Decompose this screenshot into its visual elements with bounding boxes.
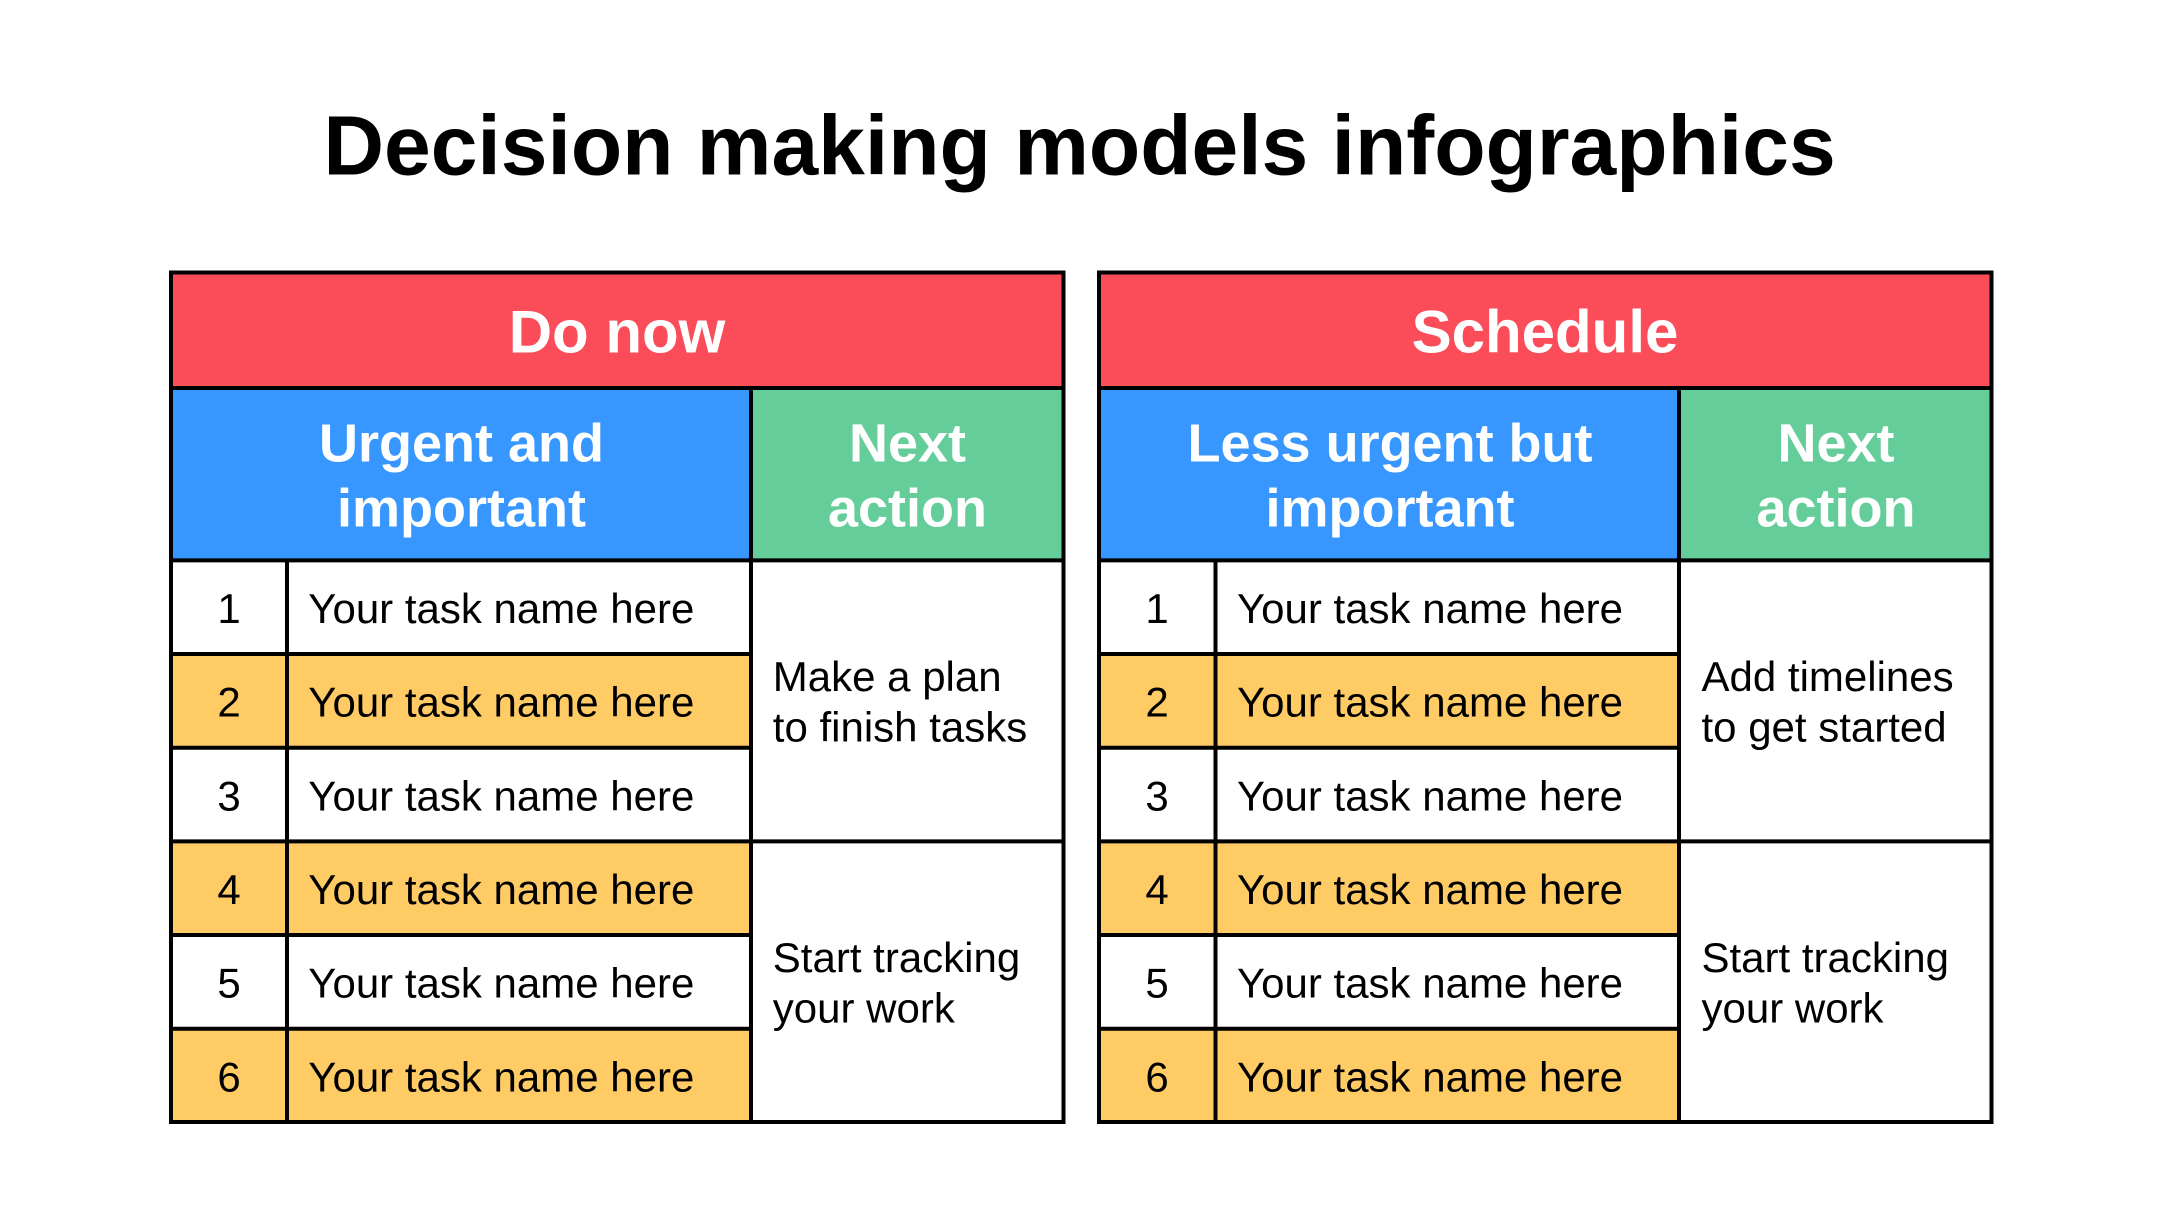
column header: Less urgent but important: Less urgent but <box>1187 414 1593 474</box>
task row 2: 2 <box>217 679 241 726</box>
task row 1: Your task name here <box>308 585 694 632</box>
task row 2 <box>1099 654 1679 748</box>
next action: Start tracking: your work <box>1702 984 1885 1031</box>
task row 6: Your task name here <box>308 1053 694 1100</box>
task row 5: 5 <box>217 960 241 1007</box>
task row 4: 4 <box>217 866 241 913</box>
task row 3: 3 <box>1145 772 1169 819</box>
task row 4 <box>171 841 751 935</box>
task row 5: Your task name here <box>308 960 694 1007</box>
next action: Make a plan <box>773 653 1027 750</box>
column header: Urgent and important <box>171 388 751 560</box>
column header: Less urgent but important <box>1099 388 1679 560</box>
column header: Next action <box>1679 388 1992 560</box>
column header: Next action: action <box>1756 478 1916 538</box>
task row 1: 1 <box>217 585 241 632</box>
task row 2: Your task name here <box>1237 679 1623 726</box>
next action: Start tracking: Start tracking <box>1702 934 1949 981</box>
next action: Make a plan: to finish tasks <box>773 703 1027 750</box>
column header: Next action: action <box>828 478 987 538</box>
heading: Do now: Do now <box>509 299 726 366</box>
panel: Schedule table <box>1099 272 1992 1122</box>
next action: Add timelines <box>1702 653 1954 750</box>
column header: Less urgent but important: important <box>1266 478 1515 538</box>
task row 2: 2 <box>1145 679 1169 726</box>
task row 4 <box>1099 841 1679 935</box>
task row 3: 3 <box>217 772 241 819</box>
heading: Schedule <box>1099 272 1992 388</box>
title: Decision making models infographics <box>323 99 1836 193</box>
task row 2 <box>171 654 751 748</box>
task row 5: 5 <box>1145 960 1169 1007</box>
next action: Start tracking: Start tracking <box>773 934 1020 981</box>
heading: Schedule: Schedule <box>1412 299 1678 366</box>
next action: Make a plan: Make a plan <box>773 653 1002 700</box>
task row 6: Your task name here <box>1237 1053 1623 1100</box>
task row 5: Your task name here <box>1237 960 1623 1007</box>
table grid lines <box>171 272 1064 1122</box>
task row 3: Your task name here <box>308 772 694 819</box>
task row 2: Your task name here <box>308 679 694 726</box>
next action: Add timelines: to get started <box>1702 703 1947 750</box>
task row 6 <box>1099 1029 1679 1122</box>
next action: Add timelines: Add timelines <box>1702 653 1954 700</box>
column header: Next action <box>751 388 1064 560</box>
column header: Next action: Next <box>1777 414 1895 474</box>
column header: Urgent and important: Urgent and <box>319 414 604 474</box>
column header: Urgent and important: important <box>337 478 586 538</box>
column header: Next action: Next <box>849 414 966 474</box>
table grid lines <box>1099 272 1992 1122</box>
task row 6: 6 <box>1145 1053 1169 1100</box>
heading: Do now <box>171 272 1064 388</box>
task row 6: 6 <box>217 1053 241 1100</box>
next action: Start tracking <box>1702 934 1949 1031</box>
task row 3: Your task name here <box>1237 772 1623 819</box>
task row 4: Your task name here <box>308 866 694 913</box>
panel: Do now table <box>171 272 1064 1122</box>
next action: Start tracking: your work <box>773 984 956 1031</box>
task row 4: 4 <box>1145 866 1169 913</box>
task row 1: 1 <box>1145 585 1169 632</box>
next action: Start tracking <box>773 934 1020 1031</box>
task row 1: Your task name here <box>1237 585 1623 632</box>
task row 4: Your task name here <box>1237 866 1623 913</box>
task row 6 <box>171 1029 751 1122</box>
